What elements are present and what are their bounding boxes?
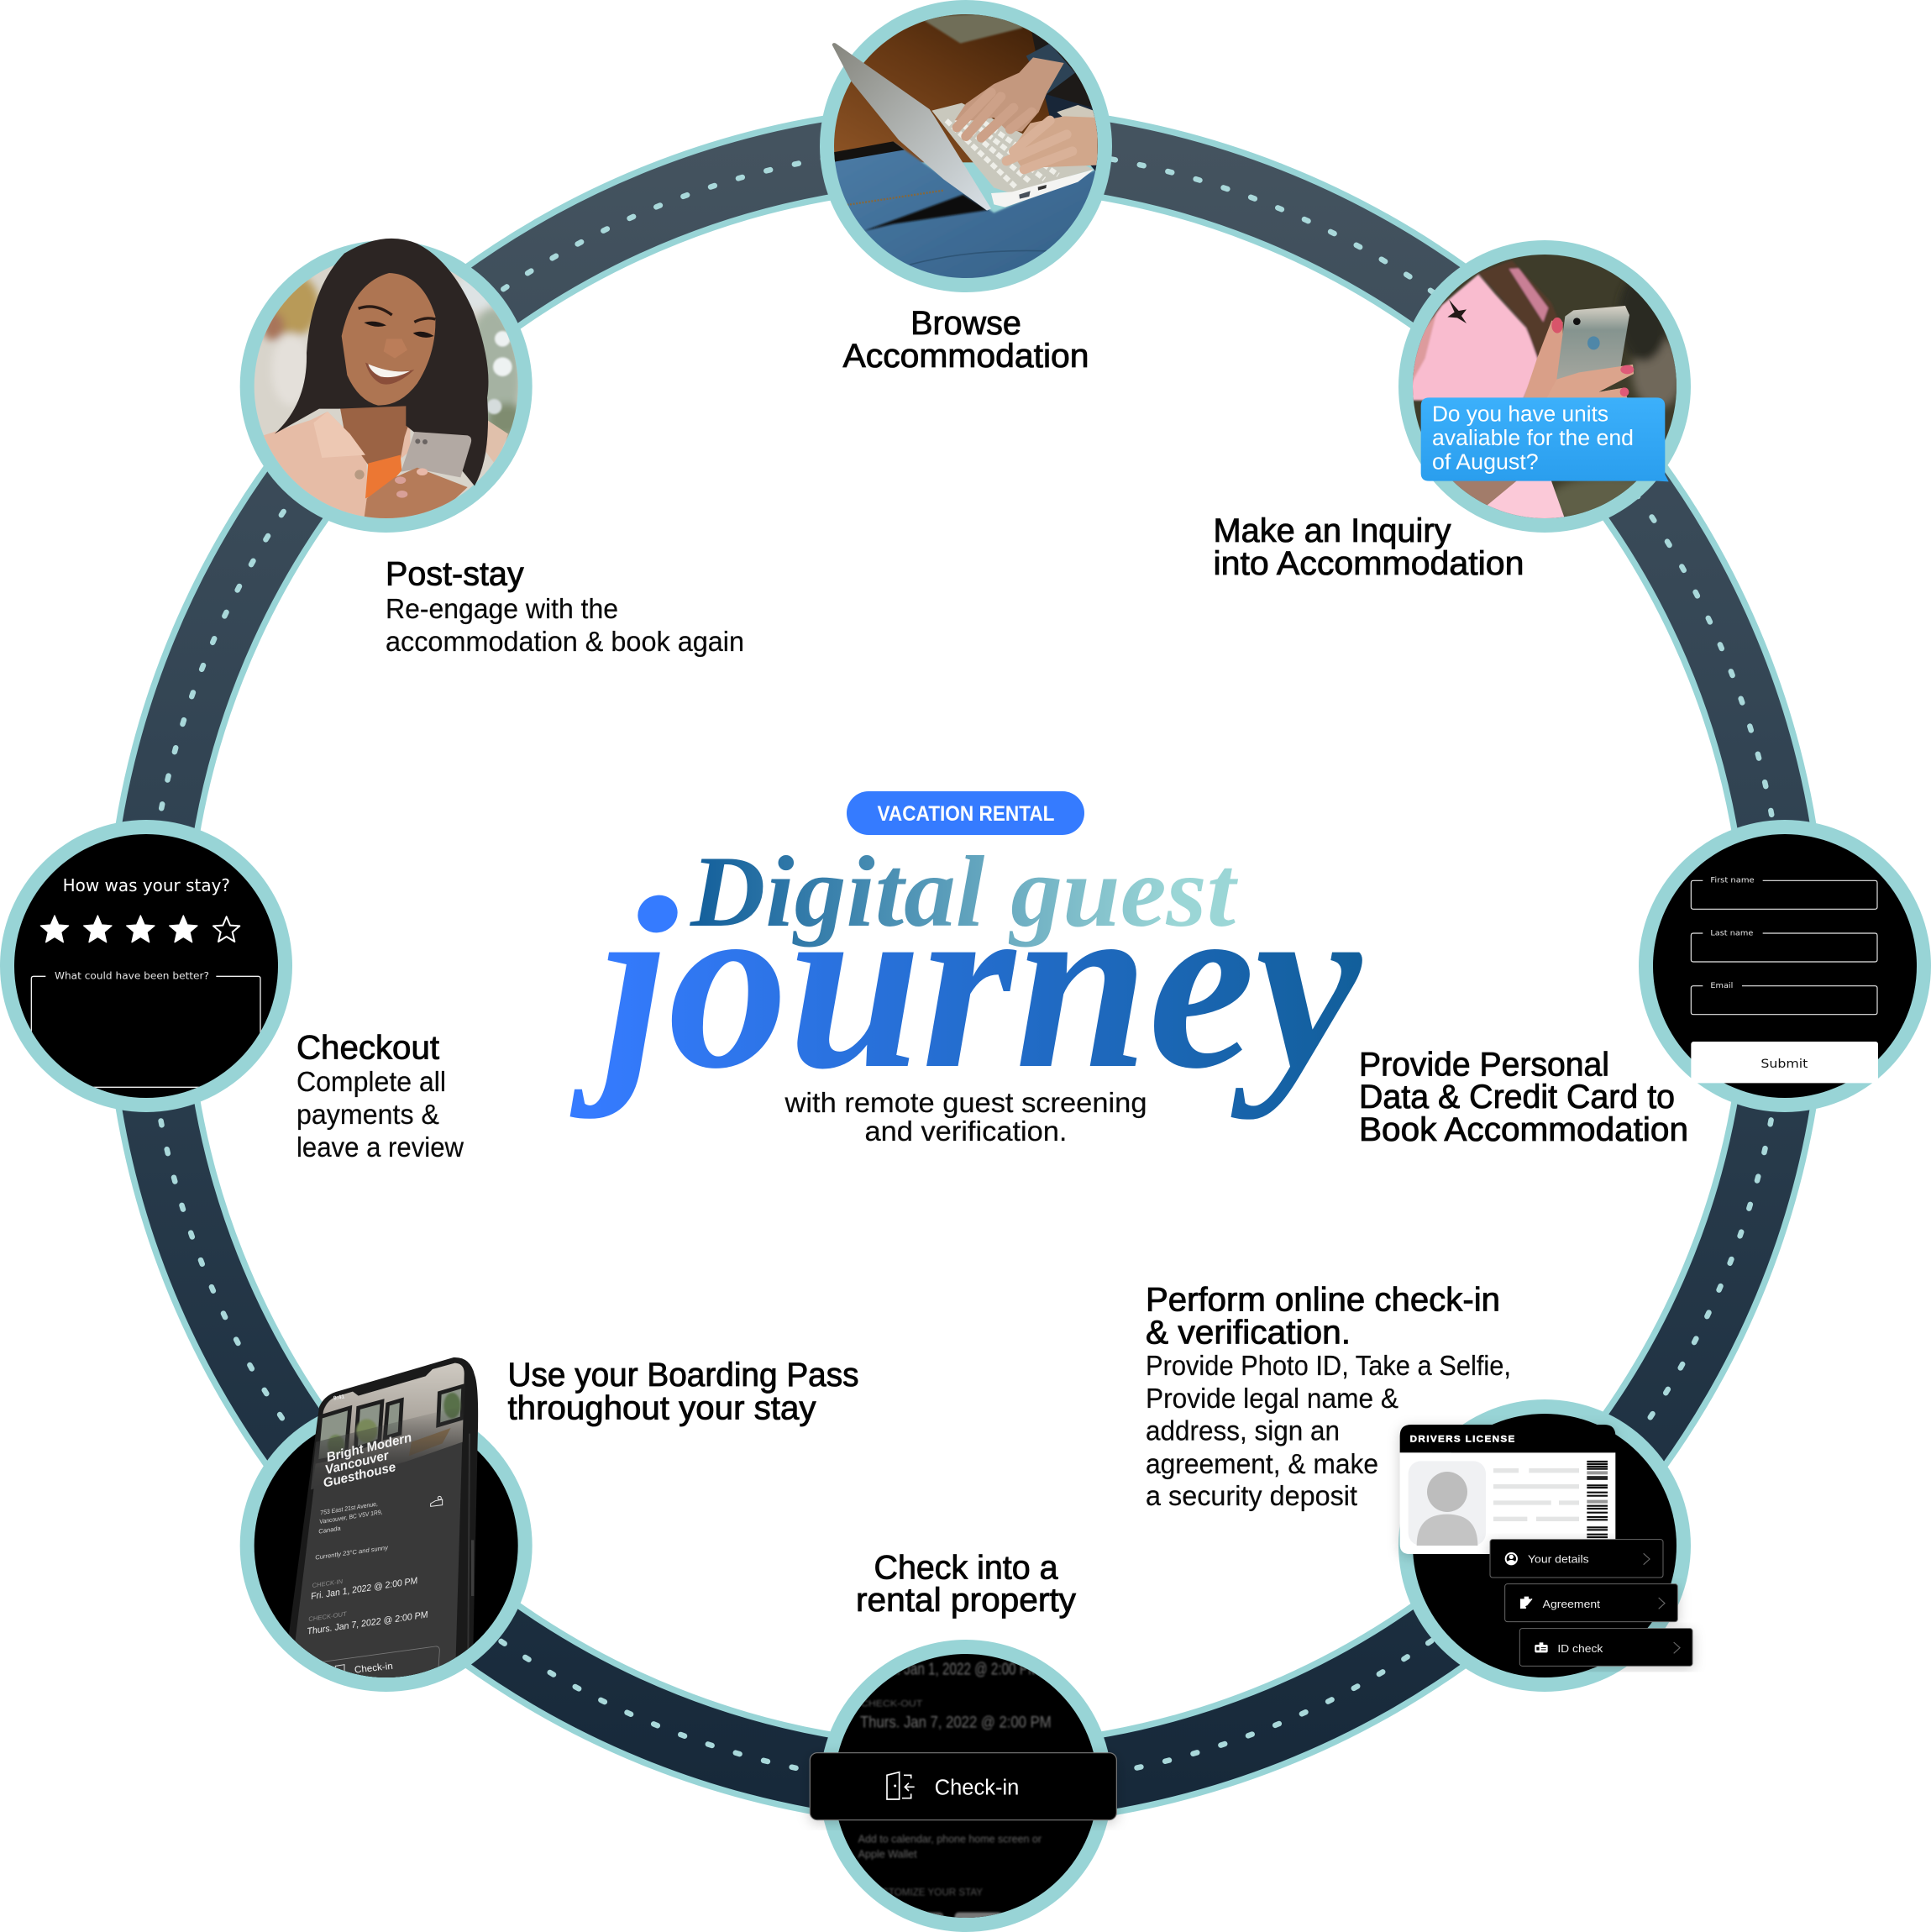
first name field: First name xyxy=(1710,877,1755,885)
chat bubble: of August? xyxy=(1432,449,1539,474)
last name field xyxy=(1691,929,1877,962)
email field xyxy=(1691,982,1877,1015)
submit button: Submit xyxy=(1760,1058,1808,1071)
your details button xyxy=(1490,1540,1663,1578)
feedback field xyxy=(31,970,260,1087)
chat bubble: Do you have units xyxy=(1432,402,1608,427)
phone screen text: Vancouver, BC V5V 1R9, xyxy=(319,1508,383,1525)
submit button xyxy=(1691,1042,1878,1083)
your details button: Your details xyxy=(1528,1553,1589,1566)
agreement button: Agreement xyxy=(1543,1598,1600,1610)
label: browse accommodation xyxy=(843,305,1089,375)
label: post-stay: accommodation & book again xyxy=(386,627,744,658)
blurred stay details: Apple Wallet xyxy=(858,1849,917,1861)
road: circular journey path xyxy=(146,146,1786,1786)
badge: vacation rental xyxy=(847,791,1084,835)
step: boarding pass xyxy=(240,1357,858,1692)
label: online check-in and verification: Perform online check-in xyxy=(1146,1282,1500,1319)
blurred stay details: Add to calendar, phone home screen or xyxy=(858,1833,1042,1845)
first name field xyxy=(1691,877,1877,909)
label: check into a rental property xyxy=(856,1549,1076,1619)
label: online check-in and verification: & verification. xyxy=(1146,1314,1351,1351)
label: online check-in and verification: a security deposit xyxy=(1146,1481,1358,1512)
label: check into a rental property: Check into a xyxy=(874,1549,1058,1586)
blurred stay details xyxy=(858,1660,1052,1924)
phone with boarding pass screen xyxy=(240,1357,533,1692)
blurred stay details: Thurs. Jan 7, 2022 @ 2:00 PM xyxy=(860,1714,1052,1732)
subtitle: and verification. xyxy=(865,1116,1067,1147)
verification screens in circle xyxy=(1398,1399,1692,1692)
label: provide personal data xyxy=(1359,1047,1688,1148)
label: provide personal data: Provide Personal xyxy=(1359,1047,1609,1084)
phone screen text: Canada xyxy=(318,1525,341,1536)
label: make an inquiry xyxy=(1213,512,1524,582)
phone screen text: Thurs. Jan 7, 2022 @ 2:00 PM xyxy=(307,1609,429,1637)
phone screen text: CHECK-IN xyxy=(312,1578,344,1589)
label: checkout: leave a review xyxy=(296,1132,464,1163)
label: browse accommodation: Browse xyxy=(910,305,1021,342)
label: boarding pass: Use your Boarding Pass xyxy=(507,1357,858,1394)
blurred stay details: CUSTOMIZE YOUR STAY xyxy=(868,1887,983,1898)
check-in button: Check-in xyxy=(935,1774,1019,1799)
phone screen text: Vancouver xyxy=(323,1448,391,1478)
phone screen text: Fri. Jan 1, 2022 @ 2:00 PM xyxy=(310,1576,419,1602)
phone screen text: Currently 23°C and sunny xyxy=(315,1543,390,1562)
title: journey: journey xyxy=(568,845,1364,1121)
id check button: ID check xyxy=(1557,1642,1603,1655)
title: digital guest: Digital guest xyxy=(690,836,1238,948)
check-in button xyxy=(810,1753,1116,1820)
phone screen text: 753 East 21st Avenue, xyxy=(320,1500,378,1516)
phone with boarding pass screen: 9:41 xyxy=(333,1394,345,1402)
label: checkout: Checkout xyxy=(296,1030,439,1067)
review screen in circle: How was your stay? xyxy=(63,875,230,895)
center title block xyxy=(568,791,1364,1147)
label: check into a rental property: rental property xyxy=(856,1582,1076,1619)
blurred stay details: CHECK-OUT xyxy=(861,1699,923,1709)
photo: smiling woman holding phone xyxy=(240,239,533,533)
photo: woman with phone and chat bubble xyxy=(1398,240,1691,533)
review screen in circle xyxy=(0,820,292,1112)
drivers license card xyxy=(1400,1425,1615,1554)
phone screen text: Check-in xyxy=(354,1662,393,1676)
step: provide personal data xyxy=(1359,820,1931,1148)
step: make an inquiry xyxy=(1213,240,1691,582)
label: post-stay: Re-engage with the xyxy=(386,594,618,625)
label: checkout: Complete all xyxy=(296,1067,446,1098)
last name field: Last name xyxy=(1710,929,1754,937)
label: checkout xyxy=(296,1030,464,1163)
label: make an inquiry: Make an Inquiry xyxy=(1213,512,1451,549)
step: post-stay xyxy=(240,239,744,658)
feedback field: What could have been better? xyxy=(55,970,209,982)
label: online check-in and verification: agreement, & make xyxy=(1146,1449,1378,1480)
chat bubble: avaliable for the end xyxy=(1432,425,1634,450)
icon: door with arrow xyxy=(887,1772,915,1799)
email field: Email xyxy=(1710,982,1733,990)
label: online check-in and verification: Provide Photo ID, Take a Selfie, xyxy=(1146,1351,1511,1382)
step: online check-in and verification xyxy=(1146,1282,1692,1692)
label: provide personal data: Book Accommodation xyxy=(1359,1111,1688,1148)
hair xyxy=(275,239,488,486)
blurred stay details: Fri. Jan 1, 2022 @ 2:00 PM xyxy=(882,1660,1039,1678)
label: provide personal data: Data & Credit Card to xyxy=(1359,1079,1675,1116)
laptop lid over ring xyxy=(832,43,991,211)
label: post-stay: Post-stay xyxy=(386,556,524,593)
chat bubble xyxy=(1421,397,1669,481)
id check button xyxy=(1519,1629,1692,1666)
label: browse accommodation: Accommodation xyxy=(843,338,1089,375)
step: check into a rental property xyxy=(810,1549,1116,1932)
step: browse accommodation xyxy=(820,0,1112,375)
label: online check-in and verification: Provide legal name & xyxy=(1146,1383,1398,1415)
photo: hands typing on laptop xyxy=(820,0,1112,292)
form screen in circle xyxy=(1639,820,1931,1112)
badge: vacation rental: VACATION RENTAL xyxy=(877,802,1055,826)
step: checkout xyxy=(0,820,464,1163)
phone screen text: Bright Modern xyxy=(325,1431,413,1465)
label: boarding pass: throughout your stay xyxy=(507,1389,816,1426)
label: post-stay xyxy=(386,556,744,658)
label: online check-in and verification: address, sign an xyxy=(1146,1416,1340,1446)
label: checkout: payments & xyxy=(296,1100,439,1131)
subtitle: with remote guest screening xyxy=(784,1088,1147,1119)
subtitle xyxy=(784,1088,1147,1147)
drivers license card: DRIVERS LICENSE xyxy=(1410,1435,1516,1445)
label: make an inquiry: into Accommodation xyxy=(1213,545,1524,582)
phone screen text: CHECK-OUT xyxy=(308,1610,348,1623)
label: boarding pass xyxy=(507,1357,858,1426)
label: online check-in and verification xyxy=(1146,1282,1511,1512)
star rating: four of five xyxy=(40,916,239,942)
phone screen text: Guesthouse xyxy=(322,1460,397,1491)
phone in hands xyxy=(364,432,471,519)
check-in screen in circle xyxy=(810,1640,1116,1932)
agreement button xyxy=(1505,1584,1677,1622)
phone screen text xyxy=(292,1431,439,1686)
